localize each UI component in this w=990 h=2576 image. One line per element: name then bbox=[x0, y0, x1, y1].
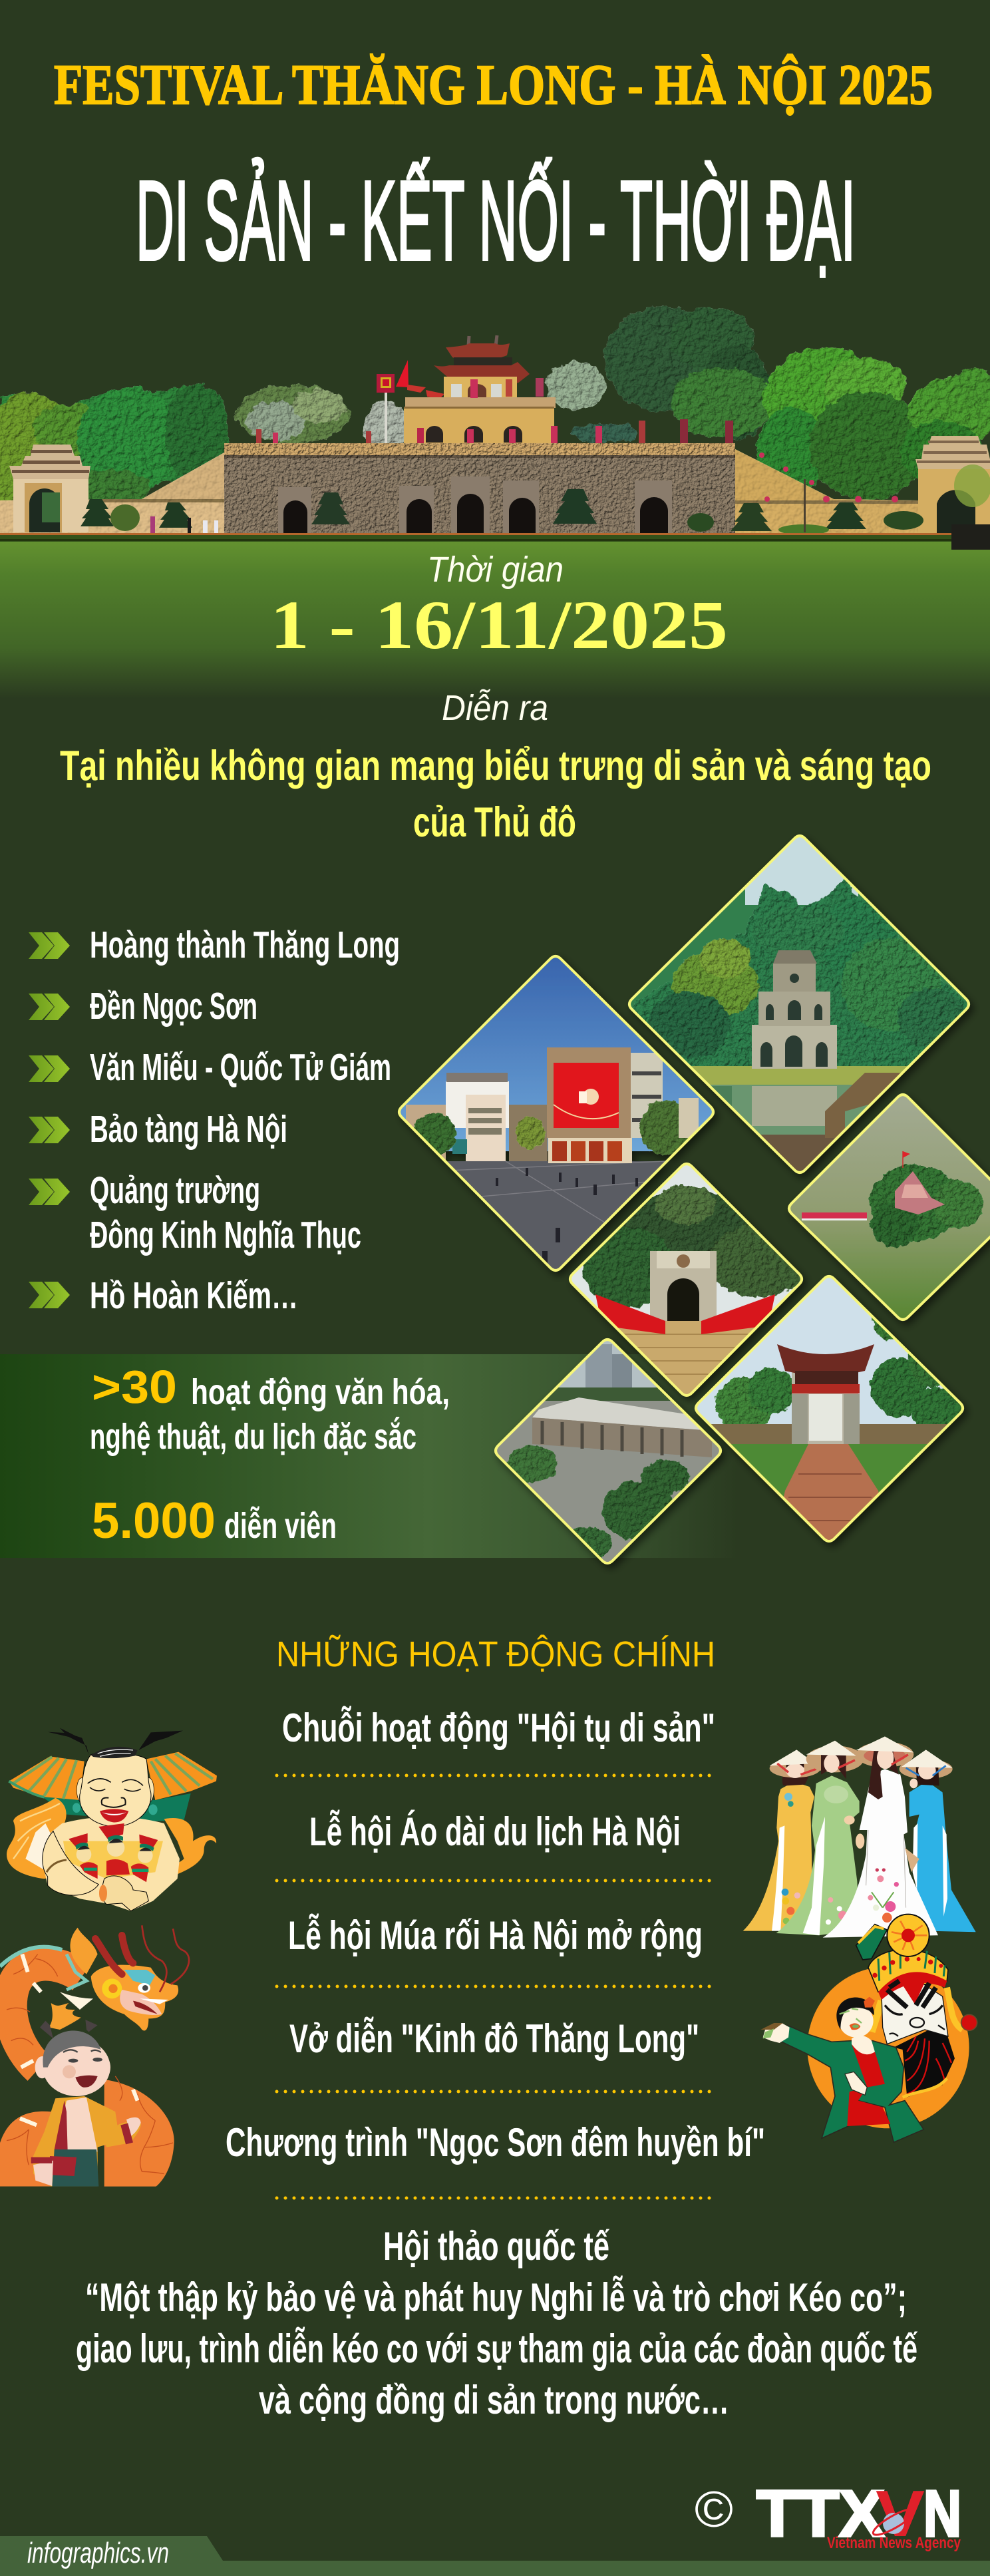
beard bbox=[894, 2030, 955, 2098]
man bbox=[33, 2096, 120, 2187]
flames bbox=[7, 1798, 67, 1879]
face bbox=[88, 1779, 143, 1791]
label: venue: Diễn ra bbox=[442, 688, 548, 728]
logo: copyright TTXVN bbox=[695, 2477, 961, 2552]
brick path bbox=[784, 1444, 879, 1540]
hat bbox=[868, 1950, 948, 1992]
LED building bbox=[547, 1047, 631, 1138]
red blouse bbox=[847, 2044, 890, 2126]
photo: Temple of Literature bbox=[692, 1271, 971, 1547]
item: Ho Hoan Kiem: Hồ Hoàn Kiếm… bbox=[90, 1274, 298, 1317]
label: time: Thời gian bbox=[427, 550, 564, 590]
hair bbox=[91, 1747, 138, 1758]
illustration: cheo singer and mask bbox=[760, 1915, 977, 2142]
orange disc bbox=[807, 1966, 969, 2128]
heading: venue line 2: của Thủ đô bbox=[413, 799, 576, 846]
globe icon bbox=[870, 2505, 917, 2539]
three puppets bbox=[69, 1823, 158, 1882]
hedge bbox=[0, 533, 951, 542]
item: Dong Kinh Nghia Thuc: Đông Kinh Nghĩa Thục bbox=[90, 1214, 361, 1256]
footer tab with source bbox=[0, 2536, 223, 2569]
photo: Ngoc Son island bbox=[785, 1091, 990, 1324]
hand bbox=[763, 2023, 790, 2043]
wall arches bbox=[278, 476, 672, 536]
panel: venue intro bbox=[60, 688, 931, 846]
yellow ao dai bbox=[743, 1749, 820, 1931]
red bridge rails bbox=[595, 1294, 775, 1334]
stat label: performers: diễn viên bbox=[224, 1506, 337, 1546]
activity 6 line 1: Hội thảo quốc tế bbox=[383, 2224, 609, 2269]
flag and lantern bbox=[377, 360, 444, 445]
white ao dai bbox=[823, 1736, 938, 1938]
activity 3: Lễ hội Múa rối Hà Nội mở rộng bbox=[288, 1913, 703, 1958]
panel: stats band bbox=[0, 1354, 739, 1558]
rampart flanks bbox=[0, 449, 918, 536]
icon: chevron 1 bbox=[29, 932, 70, 959]
panel: stats text bbox=[90, 1361, 450, 1549]
icon: chevron 6 bbox=[29, 1282, 70, 1308]
activity 1: Chuỗi hoạt động "Hội tụ di sản" bbox=[282, 1706, 715, 1750]
photo: Hanoi Museum bbox=[492, 1334, 725, 1567]
mask bbox=[882, 1976, 948, 2044]
woman jacket back arm bbox=[782, 2025, 923, 2142]
left gate bbox=[9, 445, 90, 532]
panel: imperial citadel photo bbox=[0, 306, 990, 699]
panel: time bbox=[270, 550, 728, 663]
grass lawn bbox=[0, 539, 990, 699]
head bbox=[77, 1778, 86, 1802]
bonsai trees and shrubs bbox=[81, 479, 923, 535]
icon: chevron 4 bbox=[29, 1117, 70, 1143]
stat label: activities line 2: nghệ thuật, du lịch đặc sắc bbox=[90, 1417, 416, 1457]
activity 5: Chương trình "Ngọc Sơn đêm huyền bí" bbox=[226, 2120, 765, 2165]
icon: chevron 5 bbox=[29, 1179, 70, 1205]
pavilion bbox=[777, 1344, 874, 1444]
source url: infographics.vn bbox=[27, 2537, 169, 2569]
activity 6 line 4: và cộng đồng di sản trong nước… bbox=[259, 2378, 729, 2422]
icon: chevron 2 bbox=[29, 994, 70, 1020]
item: Den Ngoc Son: Đền Ngọc Sơn bbox=[90, 985, 257, 1027]
item: Bao tang: Bảo tàng Hà Nội bbox=[90, 1108, 287, 1151]
copyright mark: © bbox=[695, 2482, 733, 2538]
stat: more than 30: >30 bbox=[92, 1361, 177, 1413]
footer band bbox=[0, 2561, 990, 2576]
panel: hero header bbox=[54, 53, 933, 284]
list: venues bbox=[29, 924, 400, 1317]
illustration: puppet master bbox=[7, 1728, 217, 1911]
item: Quang truong: Quảng trường bbox=[90, 1169, 260, 1212]
heading: main activities: NHỮNG HOẠT ĐỘNG CHÍNH bbox=[276, 1634, 715, 1674]
stat: 5000: 5.000 bbox=[92, 1493, 216, 1549]
body bbox=[42, 1817, 180, 1911]
head bbox=[839, 2004, 874, 2038]
item: Van Mieu: Văn Miếu - Quốc Tử Giám bbox=[90, 1046, 391, 1089]
right gate bbox=[915, 436, 990, 550]
tree line bbox=[0, 306, 990, 526]
tower bbox=[752, 950, 837, 1069]
agency letters: TTX bbox=[756, 2477, 884, 2550]
photo: The Huc gate bbox=[566, 1158, 808, 1401]
citadel tower bbox=[256, 335, 733, 444]
side strap and ball bbox=[947, 1988, 963, 2030]
agency letter V: V bbox=[876, 2477, 925, 2550]
stat label: activities line 1: hoạt động văn hóa, bbox=[191, 1372, 450, 1412]
green ao dai bbox=[776, 1741, 864, 1935]
people and flowers bbox=[150, 453, 898, 535]
photo: Dong Kinh Nghia Thuc square bbox=[393, 952, 719, 1278]
dragon body bbox=[11, 1964, 82, 2068]
icon: chevron 3 bbox=[29, 1055, 70, 1082]
illustration: dragon dancer bbox=[0, 1925, 189, 2187]
dragon head bbox=[91, 1965, 178, 2030]
left buildings bbox=[406, 1105, 446, 1161]
pedestrians bbox=[496, 1168, 638, 1263]
item: Hoang thanh: Hoàng thành Thăng Long bbox=[90, 924, 400, 966]
date: 1 - 16/11/2025 bbox=[270, 587, 728, 663]
panel: main activities bbox=[76, 1634, 917, 2422]
photo: Turtle Tower bbox=[625, 832, 978, 1178]
blue ao dai bbox=[900, 1749, 976, 1932]
agency letter N: N bbox=[923, 2477, 961, 2550]
illustration: ao dai women bbox=[743, 1736, 976, 1938]
activity 4: Vở diễn "Kinh đô Thăng Long" bbox=[289, 2016, 699, 2061]
citadel wall bbox=[224, 443, 735, 536]
activity 2: Lễ hội Áo dài du lịch Hà Nội bbox=[309, 1809, 681, 1854]
